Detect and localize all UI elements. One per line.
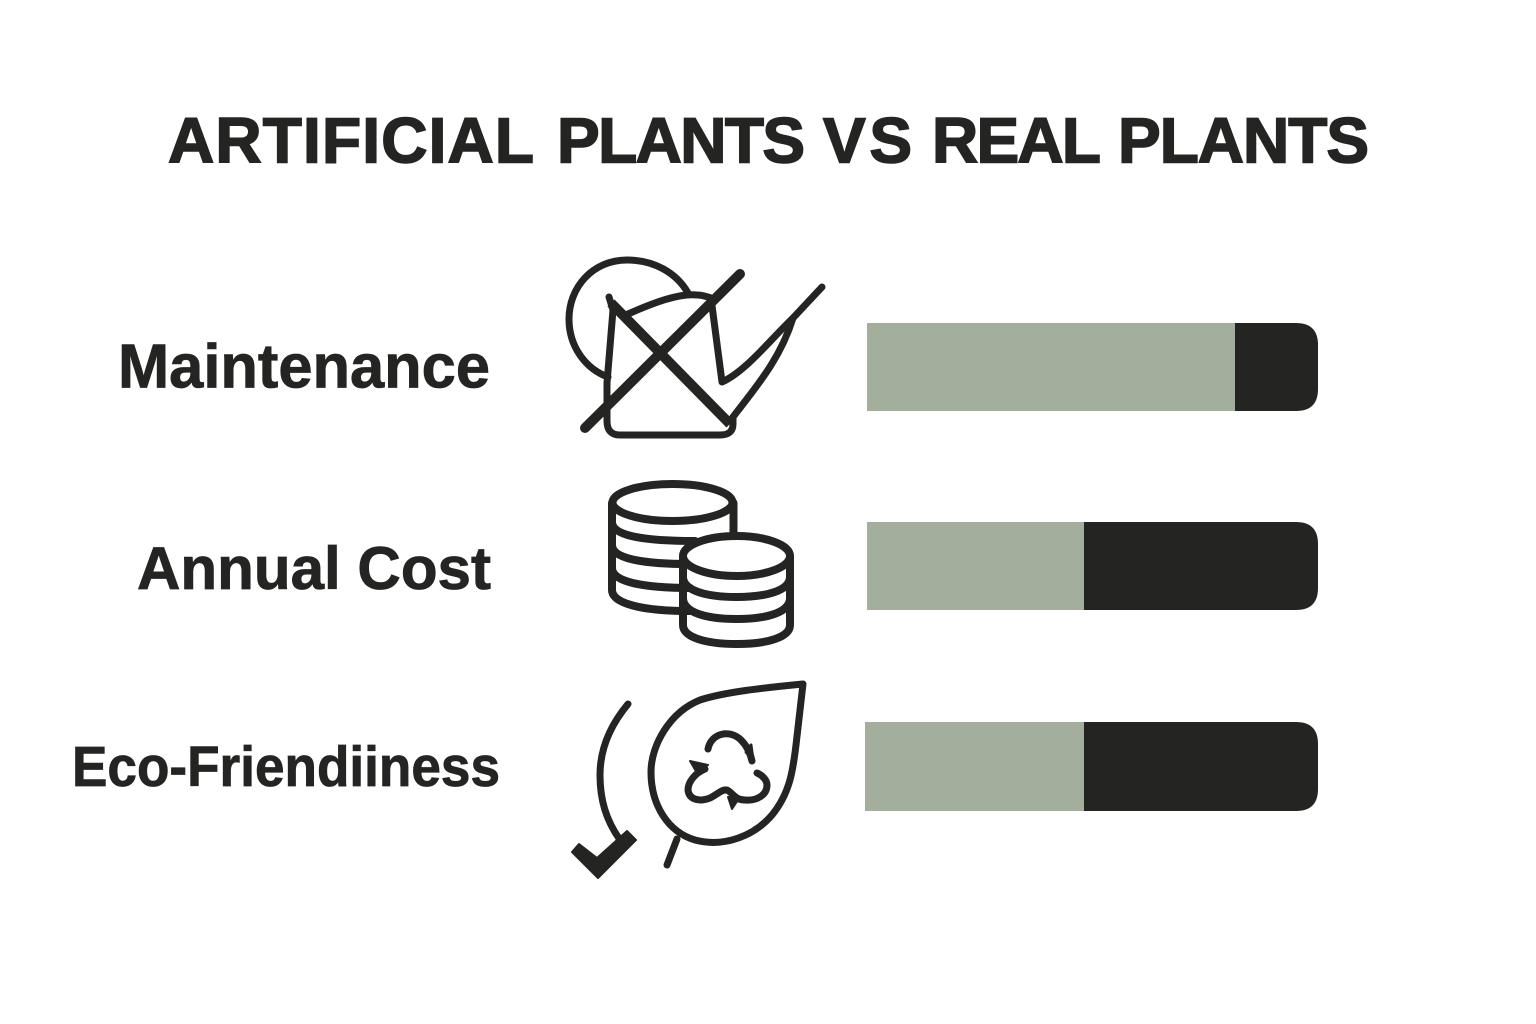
row: eco-friendliness bbox=[72, 684, 1318, 878]
title: REAL bbox=[932, 104, 1101, 176]
title: PLANTS bbox=[557, 104, 805, 176]
icon: leaf with recycling arrows bbox=[651, 684, 803, 865]
row: maintenance bbox=[118, 260, 1318, 435]
icon: arrow with check bbox=[572, 704, 636, 878]
bar: maintenance bbox=[867, 323, 1318, 411]
icon: crossed-out watering can bbox=[569, 260, 822, 435]
title: ARTIFICIAL bbox=[168, 104, 534, 176]
label: annual cost: Annual Cost bbox=[137, 535, 491, 602]
label: maintenance: Maintenance bbox=[118, 332, 490, 402]
title: VS bbox=[823, 104, 912, 176]
icon: coin stacks bbox=[612, 484, 790, 644]
bar: eco-friendliness bbox=[865, 722, 1318, 811]
title: PLANTS bbox=[1118, 104, 1369, 176]
label: eco-friendliness: Eco-Friendiiness bbox=[72, 735, 500, 799]
bar: annual cost bbox=[867, 522, 1318, 610]
row: annual cost bbox=[137, 484, 1318, 644]
